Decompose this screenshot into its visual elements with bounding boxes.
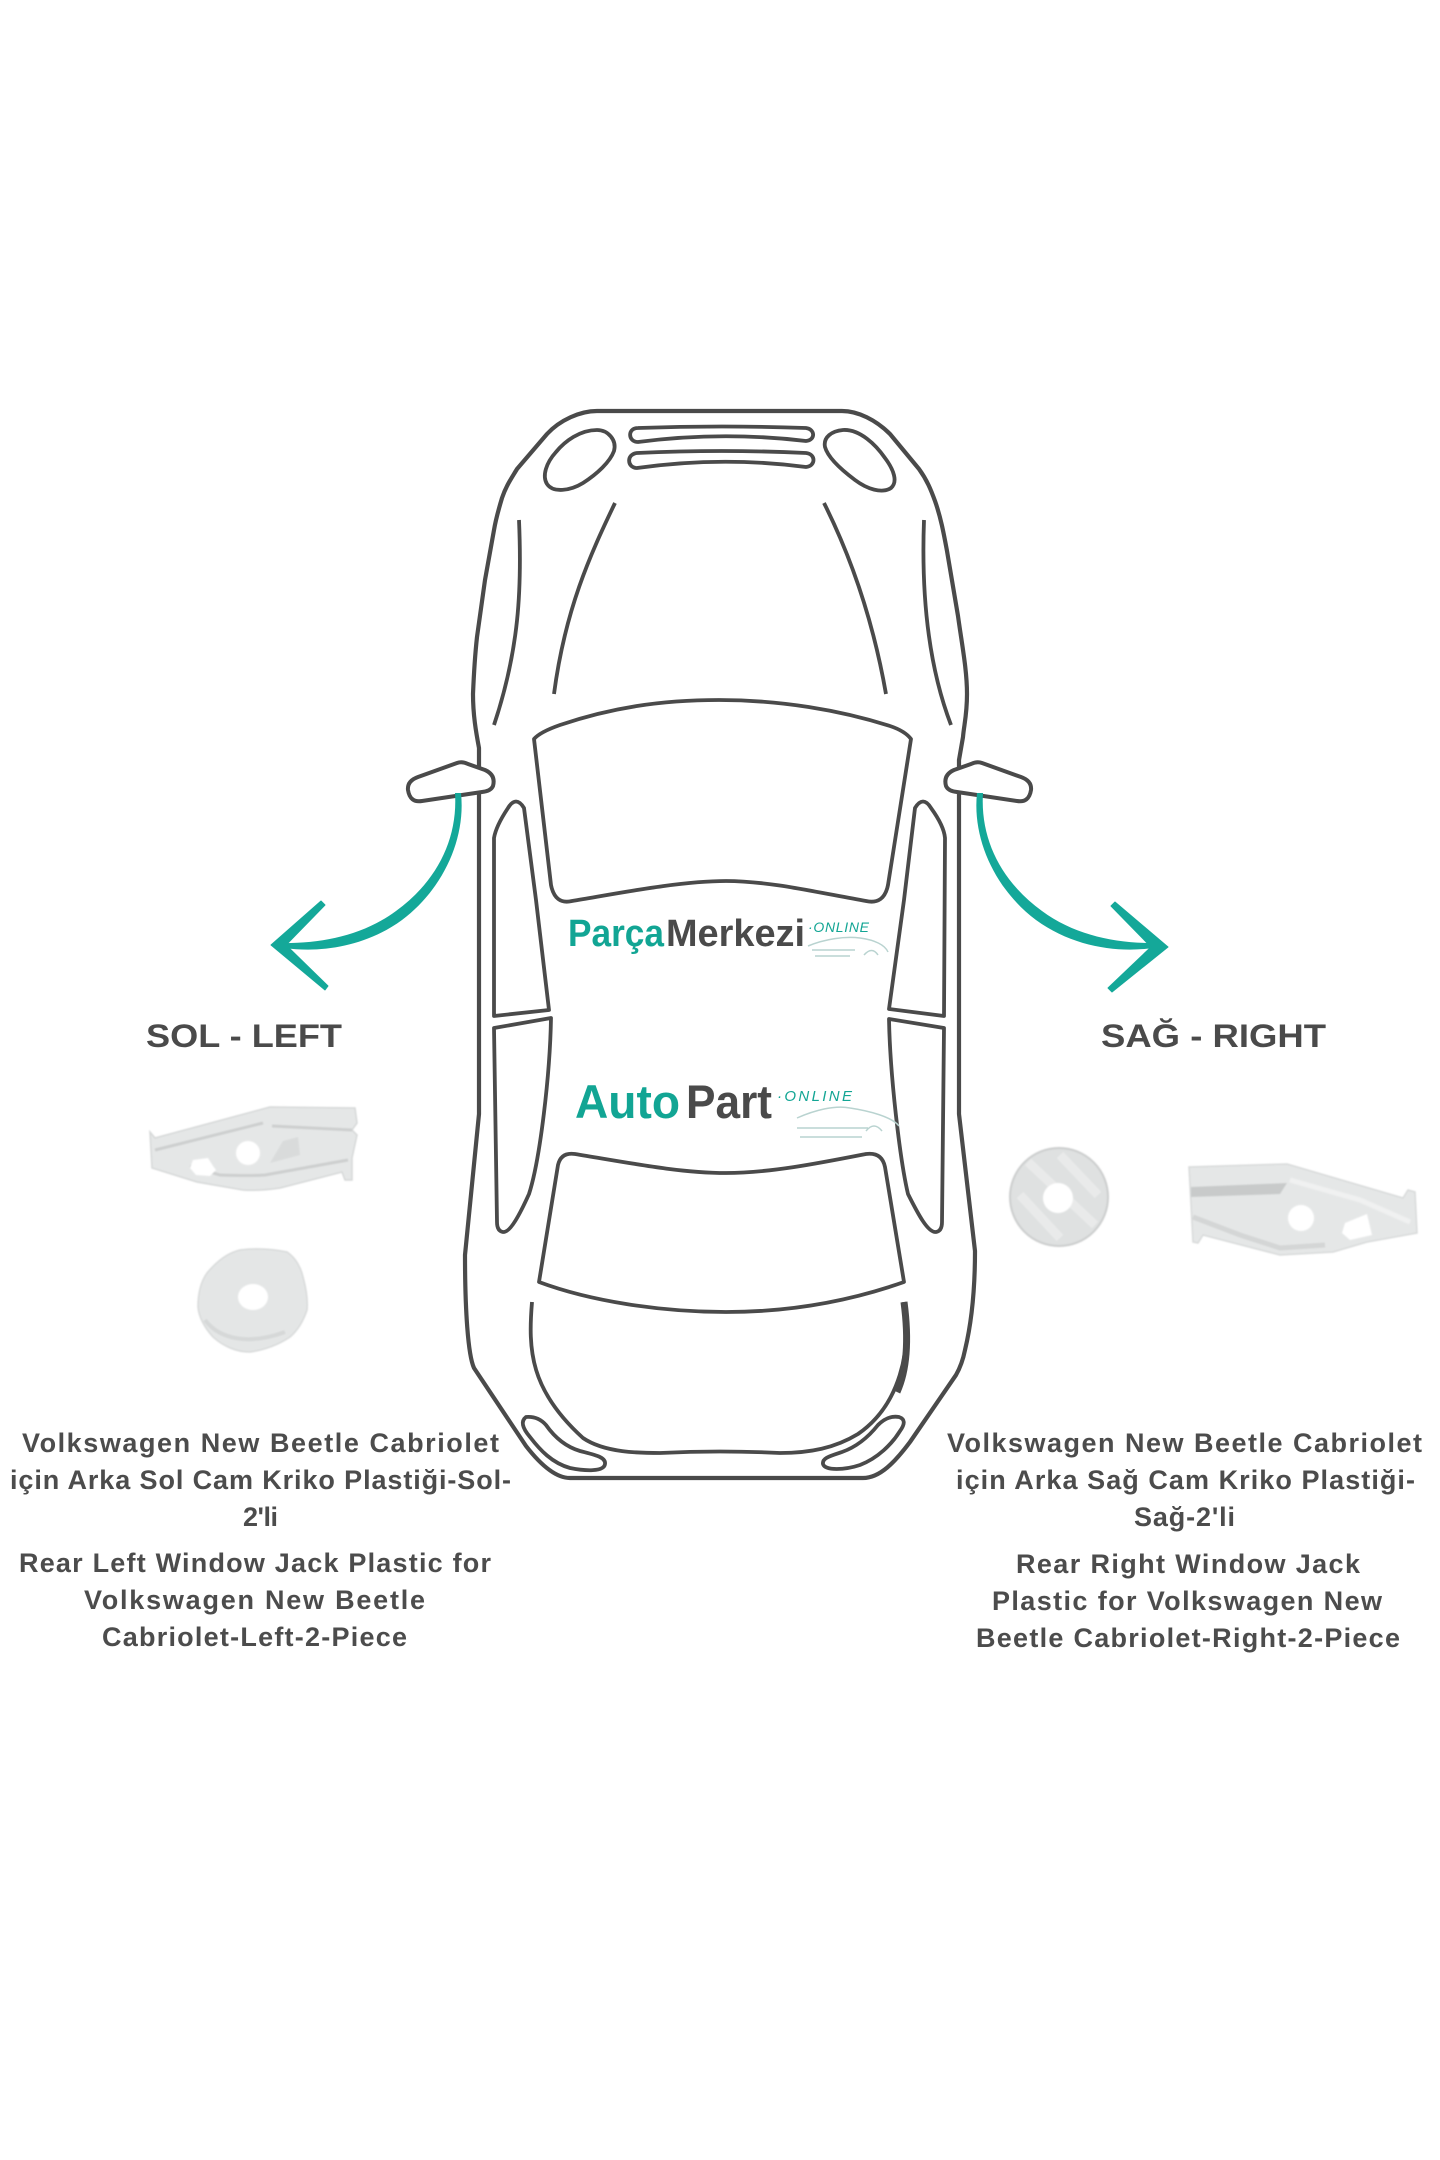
text block: left description Turkish — [10, 1428, 511, 1532]
arrow: right — [976, 793, 1168, 992]
rear window — [539, 1154, 904, 1312]
right rear side window — [889, 1019, 944, 1232]
logo: ParcaMerkezi Online: ·ONLINE — [808, 919, 870, 935]
text block: right description English: Plastic for Volkswagen New — [992, 1586, 1383, 1616]
text block: left description Turkish: Volkswagen New Beetle Cabriolet — [22, 1428, 499, 1458]
text block: right description Turkish: için Arka Sağ Cam Kriko Plastiği- — [956, 1465, 1415, 1495]
part: left bracket — [150, 1107, 357, 1190]
heading: right: SAĞ - RIGHT — [1101, 1018, 1327, 1054]
text block: right description Turkish: Sağ-2'li — [1134, 1502, 1235, 1532]
logo: AutoPart Online: Part — [686, 1075, 772, 1128]
fender line right — [923, 520, 951, 725]
heading: left: SOL - LEFT — [146, 1018, 343, 1054]
lower grille — [629, 451, 814, 468]
logo: ParcaMerkezi Online — [568, 913, 888, 956]
text block: left description English: Cabriolet-Left-2-Piece — [102, 1622, 407, 1652]
logo: AutoPart Online — [575, 1075, 899, 1137]
text block: left description English: Volkswagen New Beetle — [84, 1585, 425, 1615]
upper grille — [630, 426, 813, 442]
text block: left description English: Rear Left Window Jack Plastic for — [19, 1548, 491, 1578]
text block: left description Turkish: 2'li — [243, 1502, 278, 1532]
trunk line — [531, 1302, 906, 1453]
text block: left description English — [19, 1548, 491, 1652]
hood crease left — [554, 503, 615, 694]
fender line left — [494, 520, 520, 725]
text block: right description English: Beetle Cabriolet-Right-2-Piece — [976, 1623, 1400, 1653]
car top-view outline — [408, 411, 1031, 1478]
windshield — [534, 700, 911, 902]
text block: right description Turkish — [947, 1428, 1422, 1532]
text block: right description English: Rear Right Window Jack — [1016, 1549, 1361, 1579]
part: right bracket — [1189, 1164, 1417, 1255]
hood crease right — [824, 503, 886, 694]
logo: ParcaMerkezi Online: Parça — [568, 913, 665, 955]
faded car mark — [808, 937, 888, 956]
right mirror — [945, 762, 1031, 801]
arrow: left — [271, 793, 462, 990]
left mirror — [408, 762, 494, 801]
logo: AutoPart Online: Auto — [575, 1075, 680, 1128]
part: left round washer — [198, 1249, 307, 1352]
right taillight — [823, 1417, 904, 1469]
right headlight — [825, 430, 895, 491]
trunk line thick right side — [897, 1302, 907, 1392]
right front side window — [889, 802, 945, 1016]
left front side window — [494, 802, 549, 1016]
car body — [465, 411, 975, 1478]
left rear side window — [494, 1018, 551, 1232]
left headlight — [545, 430, 615, 490]
logo: ParcaMerkezi Online: Merkezi — [666, 913, 805, 955]
text block: right description English — [976, 1549, 1400, 1653]
part: right round washer — [1010, 1148, 1108, 1246]
text block: left description Turkish: için Arka Sol Cam Kriko Plastiği-Sol- — [10, 1465, 511, 1495]
text block: right description Turkish: Volkswagen New Beetle Cabriolet — [947, 1428, 1422, 1458]
faded car mark — [797, 1107, 899, 1137]
logo: AutoPart Online: ·ONLINE — [777, 1088, 853, 1105]
left taillight — [523, 1417, 605, 1470]
